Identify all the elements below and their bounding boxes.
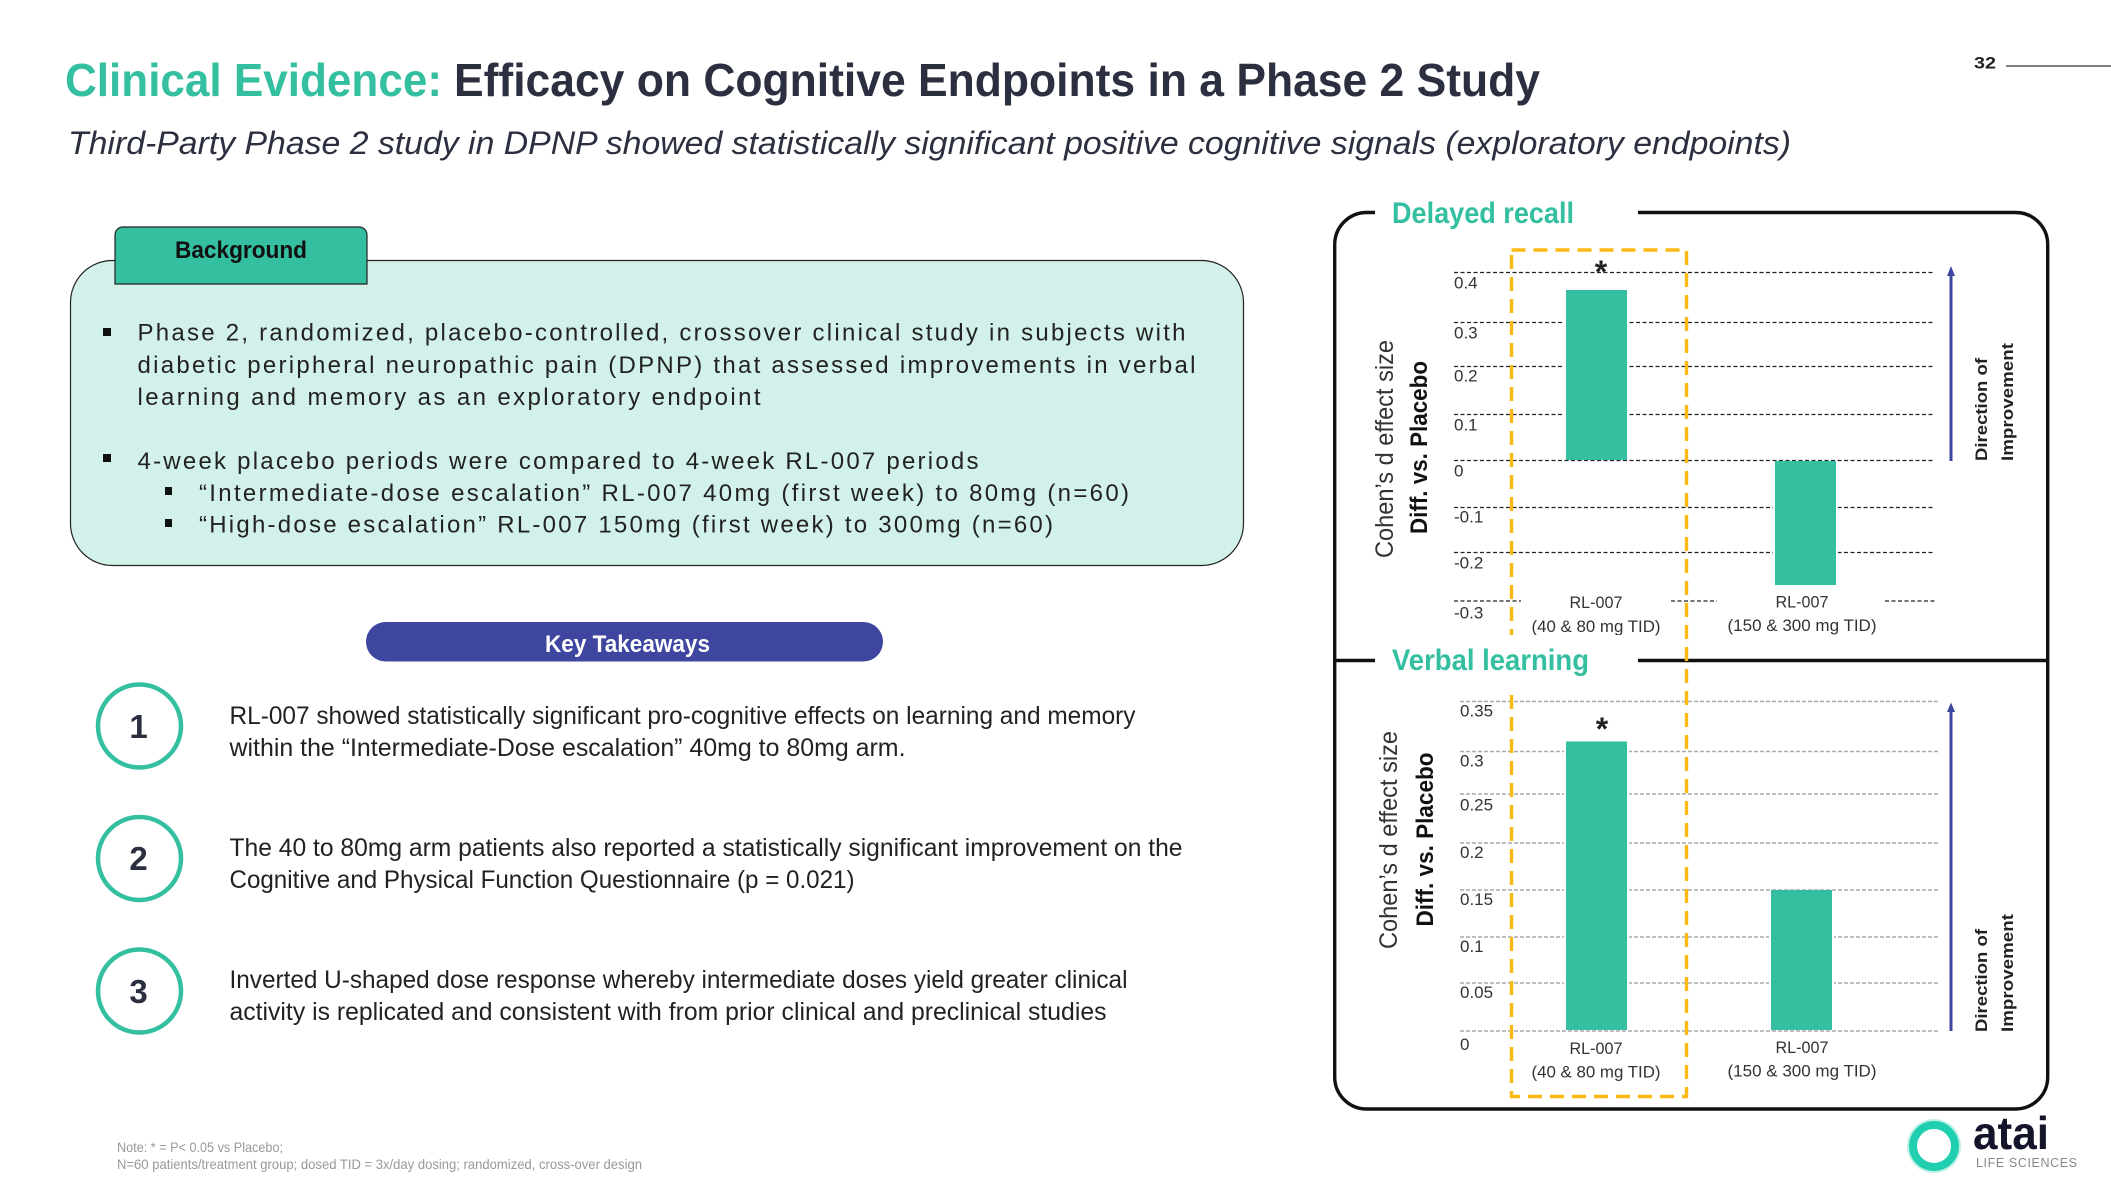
verbal learning direction label: Improvement bbox=[1998, 914, 2017, 1032]
key takeaways pill: Key Takeaways bbox=[545, 631, 710, 658]
panel: charts frame bbox=[1335, 212, 2048, 1109]
verbal learning x labels: (150 & 300 mg TID) bbox=[1728, 1062, 1876, 1080]
verbal learning direction arrow bbox=[1947, 702, 1955, 1031]
takeaway 3: Inverted U-shaped dose response whereby intermediate doses yield greater clinical bbox=[230, 966, 1128, 994]
verbal learning x labels: (40 & 80 mg TID) bbox=[1532, 1062, 1660, 1082]
verbal learning y axis title: Diff. vs. Placebo bbox=[1412, 752, 1439, 926]
takeaway 1: RL-007 showed statistically significant pro-cognitive effects on learning and memory bbox=[230, 702, 1136, 730]
delayed recall axis ticks bbox=[1454, 274, 1483, 622]
delayed recall axis ticks: -0.2 bbox=[1454, 554, 1483, 572]
delayed recall y axis title bbox=[1371, 340, 1433, 558]
delayed recall x labels: (150 & 300 mg TID) bbox=[1728, 616, 1876, 635]
verbal learning axis ticks: 0.25 bbox=[1460, 796, 1493, 814]
delayed recall axis ticks: 0.3 bbox=[1454, 324, 1478, 342]
footnote: N=60 patients/treatment group; dosed TID = 3x/day dosing; randomized, cross-over design bbox=[117, 1156, 642, 1172]
delayed recall axis ticks: 0.1 bbox=[1454, 416, 1478, 434]
verbal learning axis ticks: 0.1 bbox=[1460, 937, 1484, 956]
delayed recall x labels: (40 & 80 mg TID) bbox=[1532, 617, 1660, 636]
heading: verbal learning: Verbal learning bbox=[1392, 644, 1589, 677]
background bullet list: 4-week placebo periods were compared to 4-week RL-007 periods bbox=[138, 448, 978, 475]
verbal learning x labels: RL-007 bbox=[1776, 1038, 1828, 1057]
panel: background bbox=[70, 227, 1244, 566]
background bullet list: learning and memory as an exploratory endpoint bbox=[138, 384, 761, 411]
delayed recall y axis title: Diff. vs. Placebo bbox=[1406, 361, 1433, 534]
background bullet list bbox=[103, 320, 1196, 538]
verbal learning axis ticks: 0.15 bbox=[1460, 890, 1493, 909]
background bullet list: Phase 2, randomized, placebo-controlled, crossover clinical study in subjects with bbox=[138, 320, 1186, 346]
takeaway 3: activity is replicated and consistent with from prior clinical and preclinical studies bbox=[230, 998, 1106, 1026]
verbal learning direction label bbox=[1972, 914, 2017, 1032]
heading: verbal learning bbox=[1375, 635, 1638, 687]
background bullet list: “High-dose escalation” RL-007 150mg (first week) to 300mg (n=60) bbox=[199, 512, 1053, 538]
delayed recall x labels: RL-007 bbox=[1776, 592, 1828, 612]
chart: verbal learning bbox=[1375, 702, 2017, 1082]
title: Clinical Evidence: bbox=[65, 54, 442, 106]
delayed recall y axis title: Cohen’s d effect size bbox=[1371, 340, 1399, 558]
takeaway 3: 3 bbox=[129, 973, 148, 1010]
delayed recall axis ticks: -0.3 bbox=[1454, 604, 1483, 622]
logo: atai life sciences bbox=[1907, 1107, 2077, 1173]
verbal learning direction label: Direction of bbox=[1972, 929, 1991, 1032]
verbal learning gridlines bbox=[1460, 702, 1940, 1031]
footnote: Note: * = P< 0.05 vs Placebo; bbox=[117, 1139, 283, 1155]
delayed recall gridlines bbox=[1454, 272, 1935, 601]
footnote bbox=[117, 1139, 642, 1172]
verbal learning axis ticks: 0.2 bbox=[1460, 843, 1484, 862]
title: Efficacy on Cognitive Endpoints in a Phase 2 Study bbox=[454, 54, 1540, 106]
logo: atai life sciences: LIFE SCIENCES bbox=[1976, 1156, 2077, 1170]
takeaway 2: The 40 to 80mg arm patients also reported a statistically significant improvement on the bbox=[230, 834, 1182, 862]
background tab: Background bbox=[175, 237, 307, 264]
verbal learning x labels: RL-007 bbox=[1570, 1039, 1622, 1058]
takeaway 1: 1 bbox=[129, 708, 148, 745]
verbal learning axis ticks: 0.3 bbox=[1460, 752, 1484, 770]
chart: delayed recall bbox=[1371, 254, 2017, 636]
takeaway 3 bbox=[98, 950, 1128, 1032]
delayed recall axis ticks: 0 bbox=[1454, 462, 1463, 480]
takeaway 2 bbox=[98, 817, 1182, 900]
highlight: dashed box around 40 and 80 mg arm bbox=[1512, 250, 1686, 1096]
key takeaways pill bbox=[366, 622, 883, 662]
takeaway 1 bbox=[98, 684, 1136, 768]
verbal learning bar 40 and 80 mg bbox=[1564, 740, 1629, 1030]
delayed recall axis ticks: 0.4 bbox=[1454, 274, 1478, 292]
delayed recall bar 150 and 300 mg bbox=[1773, 461, 1838, 587]
background tab bbox=[115, 227, 367, 284]
verbal learning axis ticks: 0 bbox=[1460, 1035, 1469, 1054]
background bullet list: diabetic peripheral neuropathic pain (DPNP) that assessed improvements in verbal bbox=[138, 352, 1196, 379]
takeaway 2: 2 bbox=[129, 840, 148, 877]
verbal learning y axis title bbox=[1375, 731, 1439, 949]
verbal learning x labels bbox=[1532, 1038, 1876, 1082]
takeaway 1: within the “Intermediate-Dose escalation” 40mg to 80mg arm. bbox=[229, 734, 906, 762]
verbal learning significance asterisk: * bbox=[1596, 711, 1609, 747]
logo: atai life sciences: atai bbox=[1973, 1107, 2049, 1159]
delayed recall direction label bbox=[1972, 343, 2017, 461]
takeaway 2: Cognitive and Physical Function Questionnaire (p = 0.021) bbox=[230, 866, 854, 894]
verbal learning axis ticks bbox=[1460, 702, 1493, 1054]
subtitle: Third-Party Phase 2 study in DPNP showed statistically significant positive cognitive signals (exploratory endpoints) bbox=[68, 125, 1791, 161]
delayed recall axis ticks: -0.1 bbox=[1454, 508, 1483, 526]
delayed recall direction label: Improvement bbox=[1998, 343, 2017, 461]
delayed recall significance asterisk: * bbox=[1595, 254, 1608, 290]
page number: 32 bbox=[1974, 54, 1996, 72]
delayed recall x labels bbox=[1532, 592, 1876, 636]
delayed recall bar 40 and 80 mg bbox=[1564, 288, 1629, 460]
page number bbox=[1974, 54, 2111, 72]
heading: delayed recall: Delayed recall bbox=[1392, 197, 1574, 230]
verbal learning axis ticks: 0.35 bbox=[1460, 702, 1493, 720]
verbal learning bar 150 and 300 mg bbox=[1769, 890, 1834, 1030]
delayed recall x labels: RL-007 bbox=[1570, 593, 1622, 612]
verbal learning y axis title: Cohen’s d effect size bbox=[1375, 731, 1403, 949]
background bullet list: “Intermediate-dose escalation” RL-007 40mg (first week) to 80mg (n=60) bbox=[199, 480, 1129, 507]
delayed recall direction label: Direction of bbox=[1972, 358, 1991, 461]
delayed recall axis ticks: 0.2 bbox=[1454, 366, 1478, 386]
delayed recall direction arrow bbox=[1947, 266, 1955, 461]
verbal learning axis ticks: 0.05 bbox=[1460, 983, 1493, 1002]
